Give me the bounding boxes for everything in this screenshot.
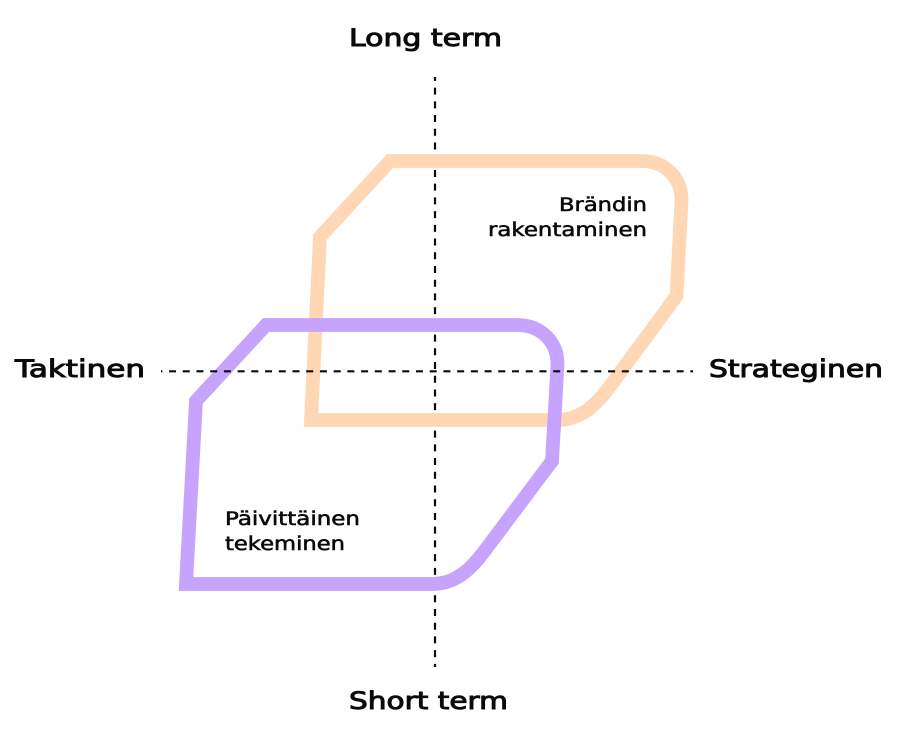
label: Päivittäinen tekeminen xyxy=(225,509,360,555)
axis label: Long term: Long term xyxy=(349,24,502,52)
label: Päivittäinen tekeminen: tekeminen xyxy=(225,534,345,555)
label: Brändin rakentaminen xyxy=(488,195,647,241)
label: Päivittäinen tekeminen: Päivittäinen xyxy=(225,509,360,530)
shape: Päivittäinen tekeminen outline xyxy=(186,325,558,584)
axis label: Taktinen: Taktinen xyxy=(14,355,145,383)
label: Brändin rakentaminen: rakentaminen xyxy=(488,220,647,241)
horizontal axis xyxy=(161,370,693,372)
label: Brändin rakentaminen: Brändin xyxy=(559,195,647,216)
shape: Brändin rakentaminen outline xyxy=(311,161,682,420)
axis label: Strateginen: Strateginen xyxy=(709,355,883,383)
axis label: Short term: Short term xyxy=(349,687,508,715)
vertical axis xyxy=(434,77,436,667)
